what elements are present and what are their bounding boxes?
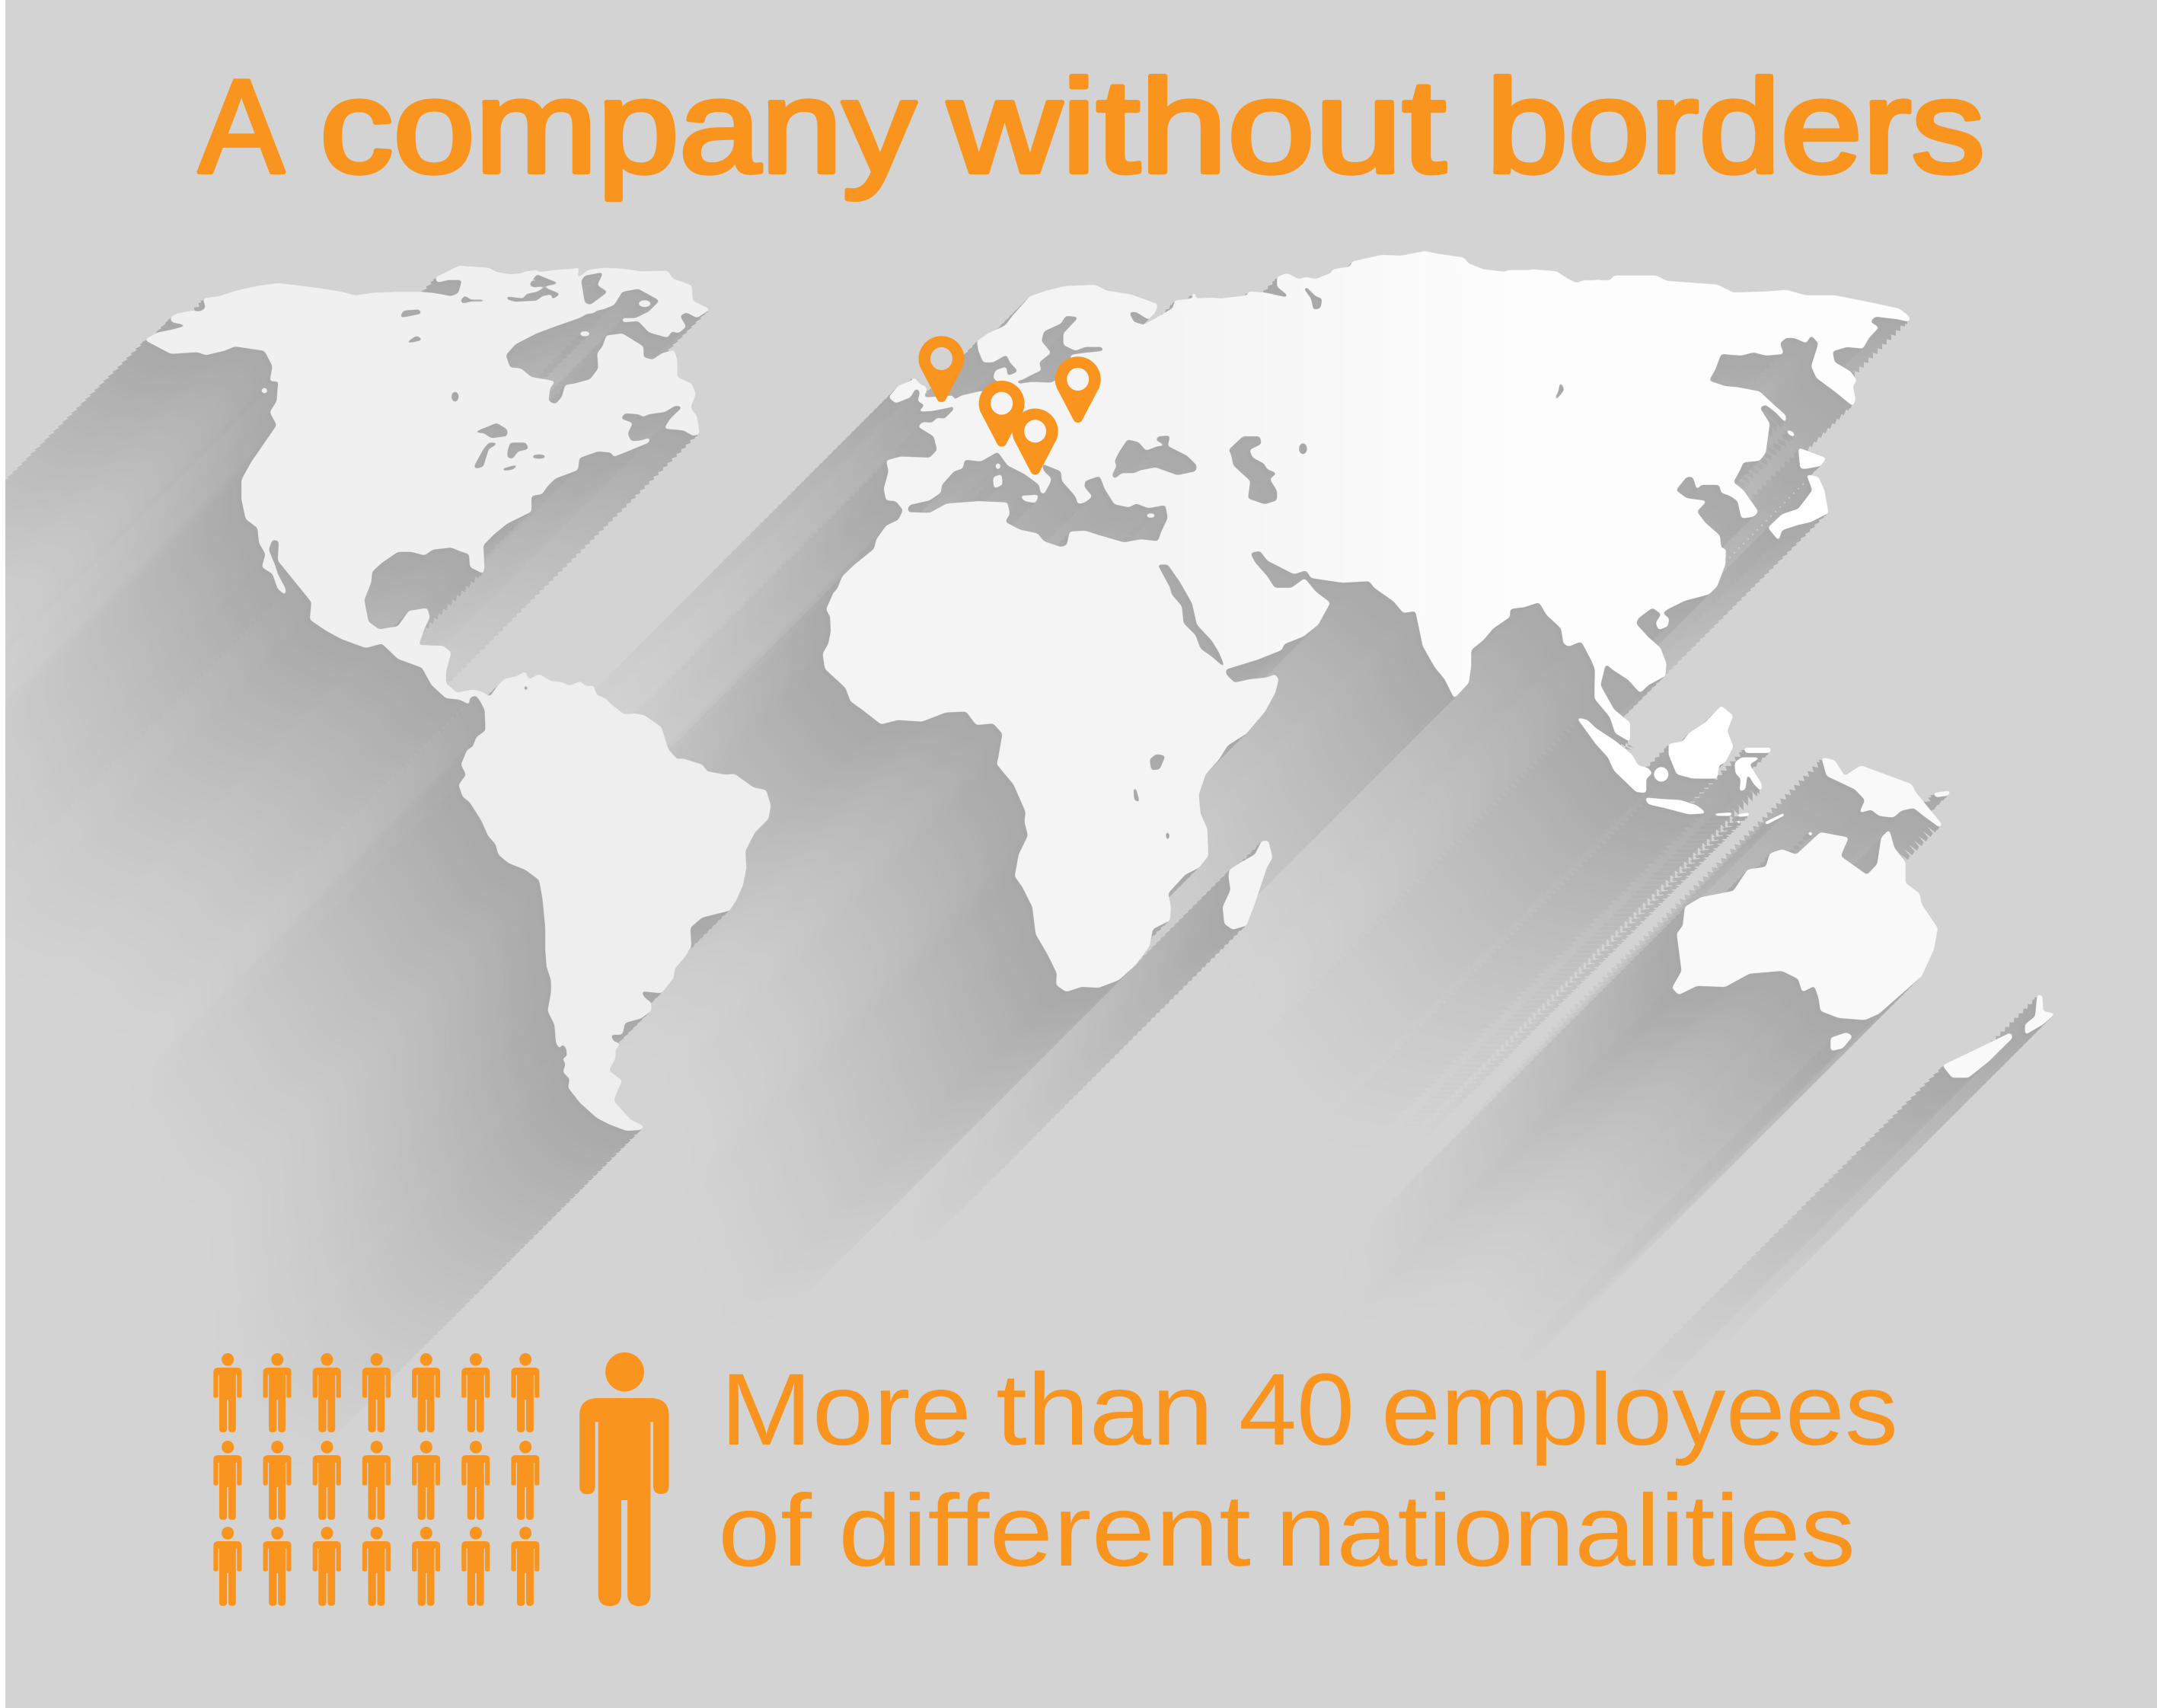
continent: south america — [458, 671, 771, 1131]
text: employees line 1: 40 — [1239, 1353, 1355, 1467]
text: employees line 1: than — [996, 1353, 1214, 1467]
icon: pin uk — [918, 336, 964, 402]
title: borders — [1486, 52, 1985, 200]
continent: africa — [822, 565, 1278, 992]
icon: pin germany — [1055, 356, 1101, 423]
japan and indonesia islands — [1576, 429, 1829, 825]
title: company — [320, 52, 916, 200]
text: employees line 2: nationalities — [1275, 1474, 1855, 1588]
text: employees line 2: different — [838, 1474, 1251, 1588]
continent: north america — [144, 266, 710, 705]
title: A — [199, 52, 284, 200]
icon: large person — [579, 1352, 669, 1606]
continent: europe and west asia — [838, 251, 1599, 698]
text: employees line 1 — [720, 1353, 1898, 1467]
icon: group of small people — [213, 1353, 539, 1606]
icon: pin france — [979, 381, 1025, 447]
continent: oceania — [1672, 757, 2055, 1077]
continent: east asia — [1507, 270, 1910, 745]
left page edge — [0, 0, 5, 1708]
text: employees line 2: of — [718, 1474, 812, 1588]
location pins — [918, 336, 1101, 474]
text: employees line 1: More — [720, 1353, 972, 1467]
title: without — [947, 52, 1446, 200]
text: employees line 1: employees — [1381, 1353, 1898, 1467]
world map — [144, 251, 2055, 1131]
title — [199, 52, 1985, 200]
long diagonal map shadow — [0, 254, 2053, 1464]
icon: pin italy — [1013, 409, 1058, 474]
british isles — [889, 293, 1197, 412]
text: employees line 2 — [718, 1474, 1855, 1588]
